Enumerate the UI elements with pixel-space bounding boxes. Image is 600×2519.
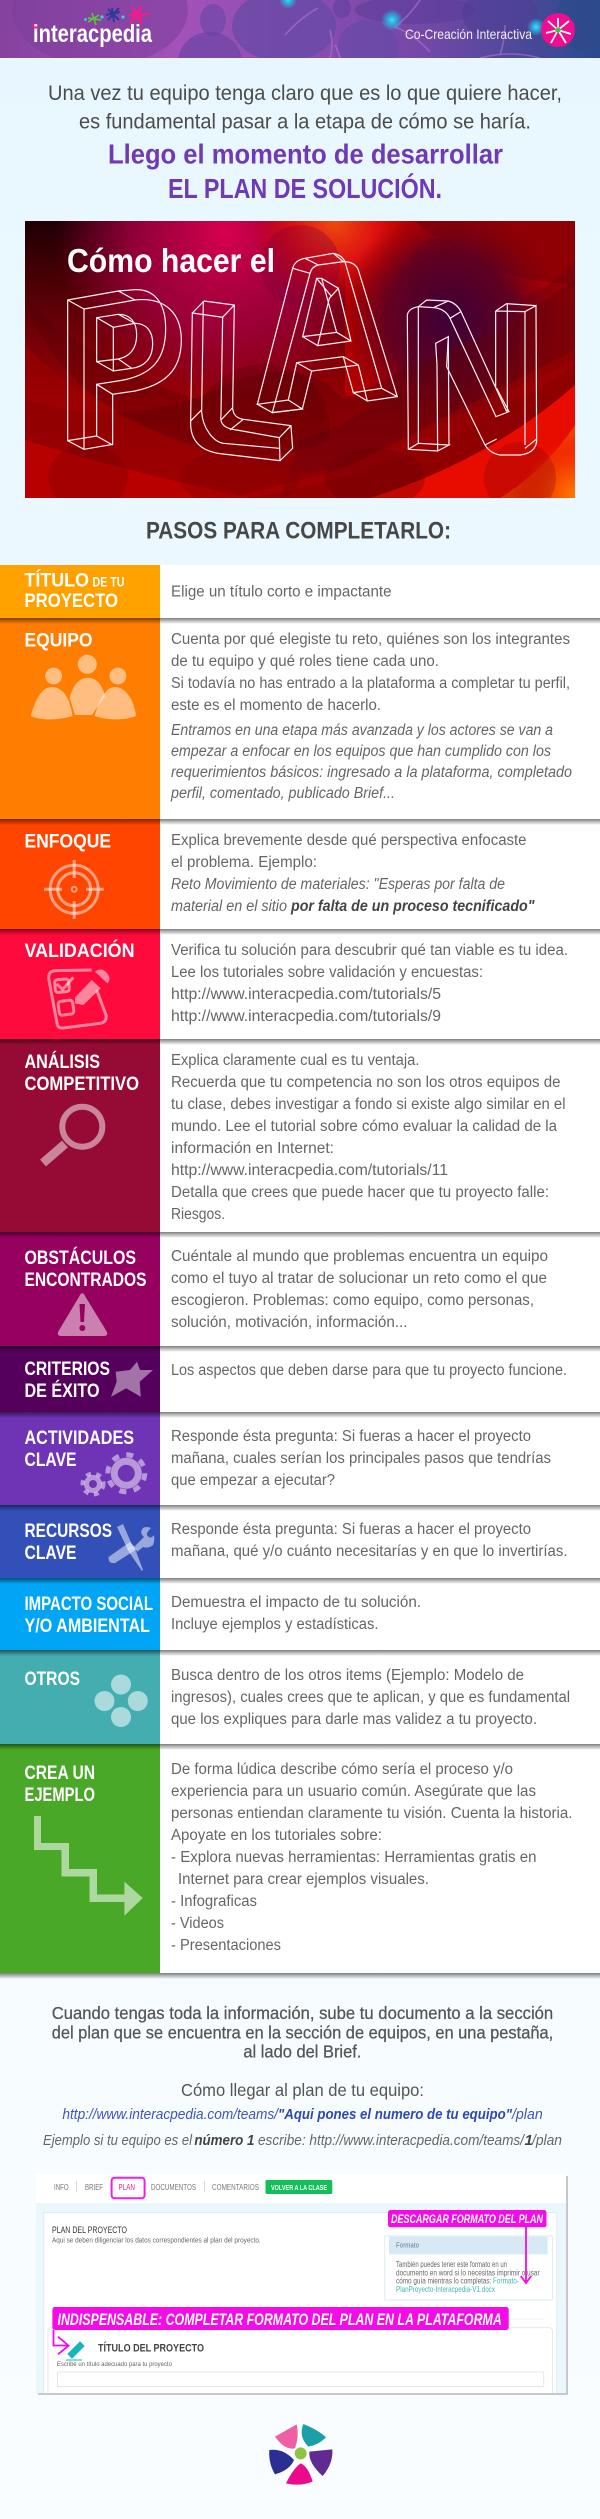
description: tu clase, debes investigar a fondo si existe algo similar en el: [171, 1096, 566, 1113]
formato box: Formato-: [493, 2277, 519, 2286]
título card: TÍTULO DEL PROYECTO: [98, 2342, 204, 2355]
icon: tools: [108, 1524, 154, 1571]
description: [171, 1761, 572, 1954]
description: Detalla que crees que puede hacer que tu proyecto falle:: [171, 1184, 549, 1201]
description: De forma lúdica describe cómo sería el proceso y/o: [171, 1761, 513, 1778]
description: Explica claramente cual es tu ventaja.: [171, 1052, 420, 1069]
how to reach the plan: [43, 2080, 562, 2149]
formato box: También puedes tener este formato en un: [396, 2260, 507, 2269]
description: que los expliques para darle mas validez a tu proyecto.: [171, 1711, 537, 1728]
description: Internet para crear ejemplos visuales.: [178, 1871, 429, 1888]
heading: el plan de solución: EL PLAN DE SOLUCIÓN.: [168, 173, 442, 204]
label: criterios de éxito: DE ÉXITO: [24, 1380, 100, 1402]
description: - Infograficas: [171, 1893, 257, 1910]
description: Apoyate en los tutoriales sobre:: [171, 1827, 382, 1844]
description: solución, motivación, información...: [171, 1314, 408, 1331]
label: validación: VALIDACIÓN: [24, 940, 134, 962]
formato box: documento en word si lo necesitas imprimir o usar: [396, 2268, 540, 2277]
navigation tabs: VOLVER A LA CLASE: [271, 2183, 327, 2192]
label: recursos clave: CLAVE: [24, 1543, 76, 1564]
description: [171, 1521, 568, 1560]
description: Busca dentro de los otros items (Ejemplo: Modelo de: [171, 1667, 524, 1684]
icon: four circles: [94, 1674, 148, 1727]
description: [171, 1428, 551, 1489]
label: criterios de éxito: [24, 1359, 110, 1402]
label: recursos clave: RECURSOS: [24, 1521, 112, 1542]
label: crea un ejemplo: EJEMPLO: [24, 1785, 95, 1806]
description: Riesgos.: [171, 1206, 225, 1223]
description: Verifica tu solución para descubrir qué tan viable es tu idea.: [171, 942, 568, 959]
label: obstáculos encontrados: [24, 1247, 146, 1291]
description: http://www.interacpedia.com/tutorials/11: [171, 1162, 448, 1179]
description: Responde ésta pregunta: Si fueras a hacer el proyecto: [171, 1428, 531, 1445]
team url: http://www.interacpedia.com/teams/: [62, 2106, 280, 2123]
formato box: cómo guía mientras lo completas:: [396, 2277, 491, 2286]
description: ingresos), cuales crees que te aplican, y que es fundamental: [171, 1689, 570, 1706]
example url: escribe: http://www.interacpedia.com/teams/: [258, 2132, 526, 2149]
callout: indispensable: [52, 2307, 509, 2354]
description: empezar a enfocar en los equipos que han cumplido con los: [171, 743, 551, 760]
example url: /plan: [531, 2132, 562, 2149]
description: [171, 1594, 421, 1633]
description: Cuenta por qué elegiste tu reto, quiénes son los integrantes: [171, 631, 570, 648]
description: que empezar a ejecutar?: [171, 1472, 335, 1489]
navigation tabs: DOCUMENTOS: [151, 2183, 196, 2192]
label: actividades clave: ACTIVIDADES: [24, 1428, 134, 1449]
description: por falta de un proceso tecnificado": [290, 898, 535, 915]
description: Elige un título corto e impactante: [171, 584, 392, 600]
description: Demuestra el impacto de tu solución.: [171, 1594, 421, 1611]
formato box: Formato: [396, 2243, 419, 2250]
label: obstáculos encontrados: ENCONTRADOS: [24, 1270, 146, 1291]
description: - Presentaciones: [171, 1937, 281, 1954]
team url: [62, 2106, 543, 2123]
hero heading text: Cómo hacer el: [67, 242, 275, 279]
tagline and emblem: [405, 13, 575, 47]
tagline and emblem: Co-Creación Interactiva: [405, 26, 532, 42]
team url: /plan: [511, 2106, 543, 2123]
table background: [0, 565, 600, 1973]
description: Explica brevemente desde qué perspectiva enfocaste: [171, 832, 526, 849]
label: análisis competitivo: ANÁLISIS: [24, 1051, 100, 1073]
label: título de tu proyecto: DE TU: [92, 574, 124, 590]
description: [171, 1052, 566, 1223]
label: análisis competitivo: [24, 1051, 139, 1095]
callout: descargar formato: [388, 2210, 546, 2283]
icon: team: [31, 655, 136, 719]
plan card: [44, 2213, 557, 2413]
label: otros: OTROS: [24, 1669, 80, 1690]
example url: 1: [524, 2132, 533, 2149]
example url: número 1: [194, 2132, 254, 2149]
panel: equipo: [0, 618, 572, 819]
icon: checklist and pencil: [49, 970, 109, 1028]
upload instructions: [52, 2003, 553, 2062]
panel: enfoque: [0, 819, 535, 929]
icon: gears: [82, 1455, 145, 1494]
description: experiencia para un usuario común. Asegúrate que las: [171, 1783, 536, 1800]
label: actividades clave: CLAVE: [24, 1450, 76, 1471]
description: este es el momento de hacerlo.: [171, 697, 381, 714]
description: Reto Movimiento de materiales: "Esperas por falta de: [171, 876, 505, 893]
description: http://www.interacpedia.com/tutorials/9: [171, 1008, 441, 1025]
panel: recursos clave: [0, 1505, 568, 1578]
description: Recuerda que tu competencia no son los otros equipos de: [171, 1074, 560, 1091]
how to reach the plan: Cómo llegar al plan de tu equipo:: [181, 2080, 424, 2100]
description: http://www.interacpedia.com/tutorials/5: [171, 986, 441, 1003]
label: impacto social y/o ambiental: Y/O AMBIENTAL: [24, 1616, 150, 1637]
formato box: PlanProyecto-Interacpedia-V1.docx: [396, 2285, 495, 2294]
header banner: [0, 0, 600, 58]
description: [171, 942, 568, 1025]
navigation tabs: INFO: [54, 2183, 69, 2192]
description: mañana, cuales serían los principales pasos que tendrías: [171, 1450, 551, 1467]
navigation tabs: [54, 2178, 332, 2198]
description: [171, 832, 535, 915]
label: análisis competitivo: COMPETITIVO: [24, 1074, 139, 1095]
label: actividades clave: [24, 1428, 134, 1471]
label: obstáculos encontrados: OBSTÁCULOS: [24, 1247, 136, 1269]
label: enfoque: ENFOQUE: [24, 832, 111, 852]
panel: actividades clave: [0, 1412, 551, 1505]
platform screenshot: [36, 2176, 568, 2395]
panel: otros: [0, 1650, 570, 1744]
description: Entramos en una etapa más avanzada y los actores se van a: [171, 722, 553, 739]
upload instructions: Cuando tengas toda la información, sube tu documento a la sección: [52, 2003, 553, 2023]
icon: teal pencil: [66, 2342, 84, 2360]
description: el problema. Ejemplo:: [171, 854, 317, 871]
description: mañana, qué y/o cuánto necesitarías y en que lo invertirías.: [171, 1543, 568, 1560]
logo: interacpedia: [32, 6, 153, 48]
navigation tabs: PLAN: [118, 2183, 135, 2192]
description: - Videos: [171, 1915, 224, 1932]
navigation tabs: BRIEF: [85, 2183, 103, 2192]
description: escogieron. Problemas: como equipo, como personas,: [171, 1292, 534, 1309]
plan card: PLAN DEL PROYECTO: [52, 2225, 127, 2235]
título card: [48, 2318, 553, 2393]
label: criterios de éxito: CRITERIOS: [24, 1359, 110, 1380]
label: título de tu proyecto: [24, 570, 124, 612]
label: impacto social y/o ambiental: IMPACTO SOCIAL: [24, 1594, 153, 1615]
team url: "Aqui pones el numero de tu equipo": [278, 2106, 513, 2123]
label: título de tu proyecto: TÍTULO: [24, 570, 89, 592]
formato box: [385, 2236, 552, 2300]
título card: Escribe un título adecuado para tu proyecto: [57, 2361, 172, 2368]
callout: descargar formato: DESCARGAR FORMATO DEL PLAN: [391, 2212, 543, 2226]
icon: stair arrow: [34, 1816, 143, 1916]
description: Si todavía no has entrado a la plataforma a completar tu perfil,: [171, 675, 570, 692]
arrow: to download link: [521, 2227, 531, 2283]
heading: el plan de solución: [108, 138, 503, 204]
description: - Explora nuevas herramientas: Herramientas gratis en: [171, 1849, 536, 1866]
description: Lee los tutoriales sobre validación y encuestas:: [171, 964, 483, 981]
label: título de tu proyecto: PROYECTO: [24, 591, 118, 612]
panel: criterios de éxito: [0, 1346, 567, 1412]
label: equipo: EQUIPO: [24, 630, 92, 652]
description: de tu equipo y qué roles tiene cada uno.: [171, 653, 439, 670]
plan card: Aqui se deben diligenciar los datos correspondientes al plan del proyecto.: [52, 2238, 261, 2245]
heading: el plan de solución: Llego el momento de desarrollar: [108, 138, 503, 170]
panel: título: [0, 565, 392, 618]
panel: obstáculos encontrados: [0, 1232, 548, 1346]
section heading: pasos para completarlo: PASOS PARA COMPLETARLO:: [146, 518, 451, 544]
panel: crea un ejemplo: [0, 1744, 572, 1973]
hero image: cómo hacer el plan: [25, 221, 575, 498]
description: perfil, comentado, publicado Brief...: [170, 785, 395, 802]
description: material en el sitio: [171, 898, 287, 915]
intro text: Una vez tu equipo tenga claro que es lo que quiere hacer,: [48, 81, 562, 105]
description: Incluye ejemplos y estadísticas.: [171, 1616, 378, 1633]
navigation tabs: COMENTARIOS: [212, 2183, 259, 2192]
intro text: es fundamental pasar a la etapa de cómo se haría.: [79, 110, 531, 134]
icon: target: [44, 860, 104, 919]
label: recursos clave: [24, 1521, 112, 1564]
upload instructions: del plan que se encuentra en la sección de equipos, en una pestaña,: [52, 2022, 553, 2042]
description: requerimientos básicos: ingresado a la plataforma, completado: [171, 764, 572, 781]
icon: warning triangle: [58, 1293, 107, 1336]
panel: análisis competitivo: [0, 1039, 566, 1232]
panel: impacto social: [0, 1578, 421, 1650]
description: [170, 631, 572, 802]
wireframe letters A and N: [257, 253, 537, 455]
description: Cuéntale al mundo que problemas encuentra un equipo: [171, 1248, 548, 1265]
footer logo: [269, 2424, 332, 2485]
icon: magnifier: [43, 1107, 102, 1163]
logo: interacpedia: interacpedia: [33, 20, 153, 48]
description: [171, 1248, 548, 1331]
example url: [43, 2132, 562, 2149]
example url: Ejemplo si tu equipo es el: [43, 2132, 193, 2149]
description: [171, 1667, 570, 1728]
upload instructions: al lado del Brief.: [243, 2042, 361, 2062]
description: Los aspectos que deben darse para que tu proyecto funcione.: [171, 1362, 567, 1379]
description: mundo. Lee el tutorial sobre cómo evaluar la calidad de la: [171, 1118, 557, 1135]
description: Responde ésta pregunta: Si fueras a hacer el proyecto: [171, 1521, 531, 1538]
icon: star: [111, 1362, 153, 1397]
label: crea un ejemplo: CREA UN: [24, 1763, 95, 1784]
intro text: [48, 81, 562, 134]
label: crea un ejemplo: [24, 1763, 95, 1806]
description: información en Internet:: [171, 1140, 334, 1157]
wireframe letters P and L: [68, 290, 293, 461]
label: impacto social y/o ambiental: [24, 1594, 153, 1637]
panel: validación: [0, 929, 568, 1039]
description: como el tuyo al tratar de solucionar un reto como el que: [171, 1270, 547, 1287]
arrow: to title icon: [54, 2330, 69, 2354]
description: personas entiendan claramente tu visión. Cuenta la historia.: [171, 1805, 572, 1822]
